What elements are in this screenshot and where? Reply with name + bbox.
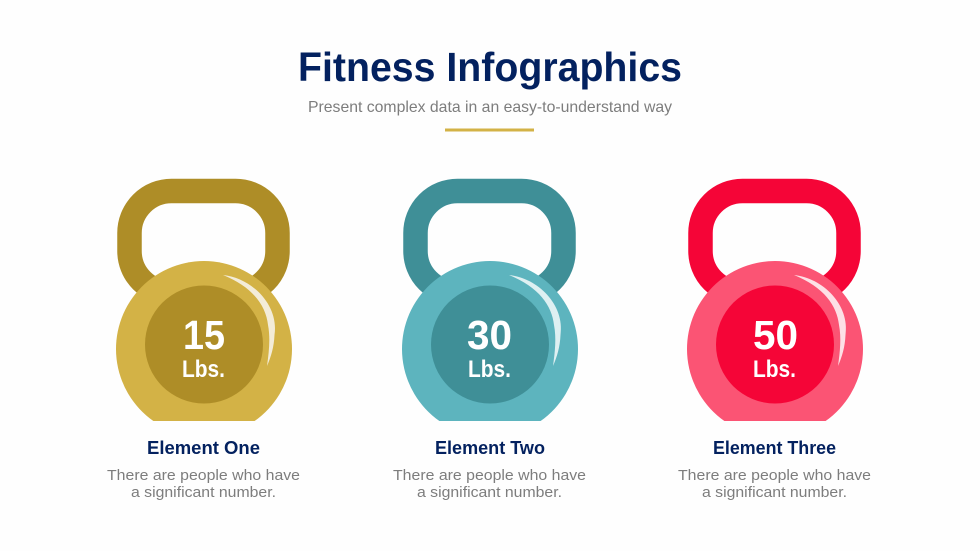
- panel: element one: [107, 191, 300, 501]
- weight unit: Lbs.: [753, 356, 796, 383]
- element description: a significant number.: [131, 484, 276, 501]
- element description: There are people who have: [393, 467, 586, 484]
- element description: a significant number.: [702, 484, 847, 501]
- icon: teal kettlebell body: [402, 261, 578, 421]
- accent underline: [445, 128, 534, 132]
- icon: red kettlebell shine: [794, 275, 846, 366]
- element description: There are people who have: [107, 467, 300, 484]
- icon: gold kettlebell body: [116, 261, 292, 421]
- icon: red kettlebell inner disc: [716, 286, 834, 404]
- element description: There are people who have: [678, 467, 871, 484]
- element heading: Element Three: [713, 438, 836, 458]
- icon: red kettlebell body: [687, 261, 863, 421]
- panel: element three: [678, 191, 871, 501]
- icon: red kettlebell handle: [700, 191, 848, 293]
- panel: element two: [393, 191, 586, 501]
- icon: gold kettlebell shine: [223, 275, 275, 366]
- icon: teal kettlebell shine: [509, 275, 561, 366]
- title: Fitness Infographics: [298, 44, 682, 90]
- weight value: 30: [467, 312, 512, 358]
- element description: a significant number.: [417, 484, 562, 501]
- icon: teal kettlebell inner disc: [431, 286, 549, 404]
- element heading: Element One: [147, 438, 260, 458]
- icon: teal kettlebell handle: [416, 191, 564, 293]
- weight unit: Lbs.: [468, 356, 511, 383]
- subtitle: Present complex data in an easy-to-understand way: [308, 99, 672, 116]
- icon: gold kettlebell inner disc: [145, 286, 263, 404]
- element heading: Element Two: [435, 438, 545, 458]
- weight unit: Lbs.: [182, 356, 225, 383]
- weight value: 15: [183, 312, 225, 358]
- weight value: 50: [753, 312, 798, 358]
- icon: gold kettlebell handle: [130, 191, 278, 293]
